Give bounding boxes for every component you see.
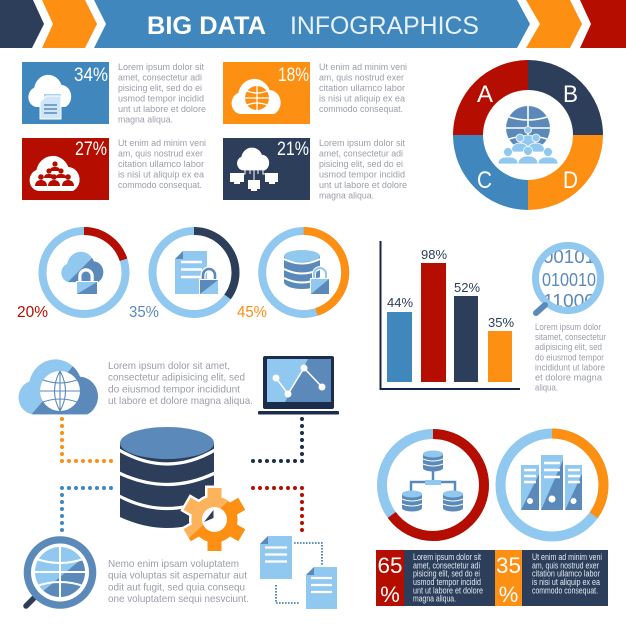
text block: ut enim 2: is nisi ut aliquip ex ea (118, 170, 205, 180)
donut: A B C D: D (563, 167, 578, 194)
text block: lorem 2: usmod tempor incidid (319, 170, 405, 180)
panel: bottom stats strip (376, 550, 608, 607)
stat: 65%: 65 (378, 553, 402, 578)
connector: orange dots (62, 419, 113, 461)
text block: ut enim 2: am, quis nostrud exer (118, 148, 203, 160)
connector: blue dots (62, 488, 113, 530)
icon: document lock (175, 251, 219, 295)
bar: 98%: 98% (421, 247, 447, 262)
icon: database (119, 427, 215, 528)
text block: lorem 2: magna aliqua. (319, 190, 374, 202)
bar: 35%: 35% (488, 315, 514, 330)
connector: red dots (252, 488, 302, 530)
text block: lorem 2: amet, consectetur adi (319, 148, 403, 160)
text block: strip ut enim: am, quis nostrud exer (532, 560, 599, 570)
icon: gear (184, 488, 245, 551)
text block: magnifier caption: aliqua. (535, 383, 558, 394)
text block: lorem 1: unt ut labore et dolore (118, 104, 206, 115)
text block: lorem 1 (118, 62, 206, 126)
stat: 35%: 35 (496, 553, 521, 578)
ring: 20% (42, 231, 126, 314)
icon: linked documents (260, 536, 337, 609)
icon: database lock (284, 250, 330, 295)
text block: magnifier caption: et dolore magna (535, 372, 603, 384)
chevron: orange (42, 0, 97, 48)
stat: 65%: % (380, 582, 400, 607)
icon: cloud with globe (232, 79, 281, 114)
text block: lorem 2: Lorem ipsum dolor sit (319, 138, 405, 149)
text block: ut enim 1: am, quis nostrud exer (319, 72, 404, 84)
icon: cloud lock (61, 252, 104, 294)
connector: navy dots (252, 419, 302, 461)
text block: nemo: one voluptatem sequi nesvciunt. (108, 593, 249, 605)
text block: strip lorem: Lorem ipsum dolor sit (413, 552, 481, 562)
text block: nemo: odit aut fugit, sed quia consequ (108, 581, 245, 593)
text block: lorem 1: usmod tempor incidid (118, 94, 204, 104)
text block: strip ut enim (532, 552, 602, 595)
bar: 52%: 52% (454, 280, 480, 295)
text block: strip lorem: usmod tempor incidid (413, 577, 481, 587)
stat: 35% (495, 550, 522, 607)
donut: A B C D: A (477, 81, 493, 108)
text block: strip lorem: magna aliqua. (413, 594, 456, 604)
text block: cloud description: consectetur adipisicing elit, sed (108, 372, 245, 384)
text block: lorem 1: Lorem ipsum dolor sit (118, 62, 204, 73)
panel: 34% cloud documents: 34% (74, 65, 108, 86)
text block: strip lorem: unt ut labore et dolore (413, 585, 483, 595)
text block: strip lorem: amet, consectetur adi (413, 560, 480, 570)
title: BIG DATA (147, 12, 266, 40)
text block: lorem 2 (319, 138, 407, 202)
text block: magnifier caption: sitamet, consectetur (535, 332, 606, 343)
text block: ut enim 2: citation ullamco labor (118, 159, 204, 170)
bar: 44% (387, 295, 413, 382)
icon: globe with people (498, 106, 558, 164)
icon: cloud with people (30, 156, 80, 191)
text block: cloud description (108, 360, 253, 407)
donut: A B C D (453, 60, 603, 210)
bar: 52% (454, 280, 480, 382)
text block: lorem 1: magna aliqua. (118, 114, 173, 126)
icon: server towers (521, 455, 582, 510)
panel: 18% cloud globe (223, 62, 310, 124)
text block: magnifier caption (535, 322, 606, 394)
ring: 35% servers (500, 434, 604, 536)
ring: 35% (152, 231, 236, 314)
icon: cloud with documents (28, 75, 71, 119)
text block: lorem 1: amet, consectetur adi (118, 72, 202, 84)
panel: 21% cloud network: 21% (277, 139, 309, 160)
panel: 18% cloud globe: 18% (278, 65, 309, 86)
icon: magnifier over binary (536, 246, 600, 313)
donut: A B C D: B (563, 81, 578, 108)
chevron: blue title band (94, 0, 530, 48)
chevron: red right (580, 0, 626, 48)
stat: 35%: % (499, 582, 518, 607)
bar: 44%: 44% (387, 295, 413, 310)
text block: lorem 2: pisicing elit, sed do ei (319, 159, 403, 170)
panel: 21% cloud network (223, 138, 310, 200)
bar: 35% (488, 315, 514, 382)
text block: cloud description: ut labore et dolore magna aliqua. (108, 395, 253, 407)
text block: magnifier caption: adipisicing elit, sed (535, 342, 602, 353)
icon: magnifier over binary: 010010 (542, 270, 596, 290)
text block: magnifier caption: incididunt ut labore (535, 362, 605, 373)
icon: magnifier over binary: 11000 (543, 291, 595, 311)
text block: lorem 2: unt ut labore et dolore (319, 180, 407, 191)
icon: magnifier over binary: 00101 (543, 247, 595, 267)
text block: nemo: Nemo enim ipsam voluptatem (108, 558, 239, 570)
icon: database network (402, 450, 463, 512)
panel: 34% cloud documents (22, 62, 109, 124)
text block: ut enim 2: Ut enim ad minim veni (118, 138, 206, 149)
icon: laptop chart (258, 356, 339, 414)
text block: ut enim 1 (319, 62, 407, 115)
label: 35%: 35% (129, 304, 159, 321)
icon: cloud with monitors (230, 148, 278, 191)
stat: 65% (376, 550, 404, 607)
text block: ut enim 2 (118, 138, 206, 191)
text block: strip lorem: pisicing elit, sed do ei (413, 569, 480, 579)
text block: ut enim 1: commodo consequat. (319, 104, 403, 115)
panel: 27% cloud people (22, 138, 109, 200)
text block: ut enim 1: is nisi ut aliquip ex ea (319, 94, 406, 104)
bar chart (380, 241, 520, 389)
text block: nemo: quia voluptas sit aspernatur aut (108, 570, 247, 582)
text block: strip lorem (413, 552, 483, 604)
text block: lorem 1: pisicing elit, sed do ei (118, 83, 202, 94)
icon: magnifier globe (24, 536, 96, 609)
text block: magnifier caption: do eiusmod tempor (535, 352, 604, 363)
text block: cloud description: do eiusmod tempor incididunt (108, 383, 240, 395)
banner (0, 0, 626, 48)
panel: 27% cloud people: 27% (75, 139, 107, 160)
text block: magnifier caption: Lorem ipsum dolor (535, 322, 601, 333)
text block: ut enim 1: Ut enim ad minim veni (319, 62, 407, 73)
donut: A B C D: C (477, 167, 492, 194)
label: 45%: 45% (237, 304, 267, 321)
text block: nemo (108, 558, 249, 605)
ring: 45% (262, 231, 345, 314)
text block: strip ut enim: is nisi ut aliquip ex ea (532, 577, 600, 587)
icon: cloud globe (18, 359, 98, 414)
title: INFOGRAPHICS (290, 12, 479, 40)
text block: ut enim 2: commodo consequat. (118, 180, 202, 191)
text block: strip ut enim: citation ullamco labor (532, 569, 600, 579)
text block: strip ut enim: Ut enim ad minim veni (532, 552, 602, 562)
text block: strip ut enim: commodo consequat. (532, 585, 598, 595)
label: 20%: 20% (17, 304, 48, 321)
bar: 98% (421, 247, 447, 382)
ring: 65% databases (382, 434, 484, 536)
chevron: orange right (526, 0, 582, 48)
title (147, 12, 479, 40)
chevron: navy (0, 0, 44, 48)
text block: ut enim 1: citation ullamco labor (319, 83, 405, 94)
text block: cloud description: Lorem ipsum dolor sit amet, (108, 360, 230, 372)
